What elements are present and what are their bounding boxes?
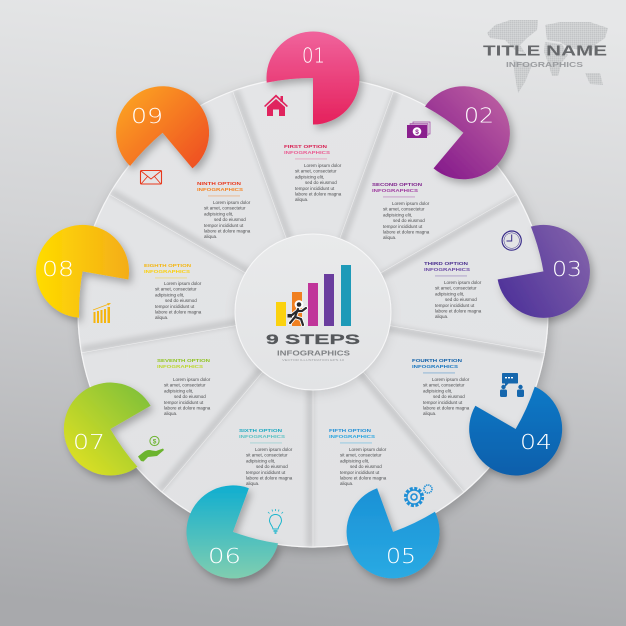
- option 9 text: aliqua.: [204, 234, 217, 239]
- option 5 text: aliqua.: [340, 481, 353, 486]
- option 7 text: INFOGRAPHICS: [157, 364, 204, 370]
- number 06: 06: [208, 544, 241, 568]
- option 3 text: adipisicing elit,: [435, 291, 464, 296]
- number 02: 02: [464, 104, 494, 128]
- option 4 text: tempor incididunt ut: [423, 400, 463, 405]
- option 6 text: INFOGRAPHICS: [239, 434, 286, 440]
- option 5 text: sed do eiusmod: [350, 464, 382, 469]
- wheel disc: [78, 77, 548, 547]
- hub runner icon: [288, 302, 306, 325]
- option 1 text: adipisicing elit,: [295, 174, 324, 179]
- option 5 text: INFOGRAPHICS: [329, 434, 376, 440]
- hub title: INFOGRAPHICS: [277, 348, 350, 358]
- option 4 text: [412, 358, 470, 416]
- option 3 text: labore et dolore magna: [435, 308, 482, 314]
- icon: cash: [407, 122, 430, 138]
- icon: light bulb: [268, 509, 283, 533]
- hub title: [266, 332, 360, 362]
- option 6 text: Lorem ipsum dolor: [255, 447, 293, 452]
- option 8 text: Lorem ipsum dolor: [164, 281, 202, 286]
- option 3 text: THIRD OPTION: [424, 261, 469, 267]
- option 3 text: sed do eiusmod: [445, 297, 477, 302]
- number 08: 08: [42, 257, 74, 281]
- icon: two people talking: [500, 373, 524, 397]
- option 4 text: sit amet, consectetur: [423, 383, 465, 388]
- option 2 text: INFOGRAPHICS: [372, 188, 419, 194]
- option 1 text: tempor incididunt ut: [295, 186, 335, 191]
- option 8 text: EIGHTH OPTION: [144, 263, 192, 269]
- option 2 text: labore et dolore magna: [383, 230, 430, 234]
- step 07 pie: [47, 366, 174, 493]
- number 05: 05: [386, 544, 416, 568]
- option 4 text: sed do eiusmod: [433, 394, 465, 399]
- option 7 text: tempor incididunt ut: [164, 400, 204, 405]
- central hub: [235, 234, 391, 390]
- option 6 text: labore et dolore magna: [246, 476, 293, 480]
- option 7 text: labore et dolore magna: [164, 406, 211, 410]
- option 1 text: [284, 144, 342, 202]
- option 9 text: INFOGRAPHICS: [197, 187, 244, 193]
- option 6 text: adipisicing elit,: [246, 458, 275, 463]
- title block: [483, 43, 607, 69]
- step 08 pie: [29, 218, 136, 325]
- option 3 text: Lorem ipsum dolor: [444, 280, 482, 285]
- option 6 text: sit amet, consectetur: [246, 453, 288, 458]
- option 2 text: aliqua.: [383, 235, 396, 240]
- option 5 text: sit amet, consectetur: [340, 453, 382, 458]
- option 9 text: [197, 181, 251, 239]
- icon: envelope: [140, 170, 162, 184]
- number 07: 07: [73, 430, 105, 454]
- option 7 text: sit amet, consectetur: [164, 383, 206, 388]
- step 05 pie: [333, 472, 453, 591]
- number 04: 04: [520, 430, 552, 454]
- option 4 text: Lorem ipsum dolor: [432, 377, 470, 382]
- option 8 text: sed do eiusmod: [165, 298, 197, 303]
- option 8 text: aliqua.: [155, 315, 168, 320]
- option 6 text: tempor incididunt ut: [246, 470, 286, 475]
- option 5 text: Lorem ipsum dolor: [349, 447, 387, 452]
- option 9 text: tempor incididunt ut: [204, 223, 244, 228]
- option 8 text: labore et dolore magna: [155, 310, 202, 314]
- option 2 text: Lorem ipsum dolor: [392, 201, 430, 206]
- option 4 text: aliqua.: [423, 411, 436, 416]
- step 06 pie: [173, 472, 293, 591]
- title block: INFOGRAPHICS: [506, 62, 583, 69]
- option 8 text: adipisicing elit,: [155, 292, 184, 297]
- world map watermark: [487, 20, 608, 93]
- number 09: 09: [131, 104, 163, 128]
- option 1 text: INFOGRAPHICS: [284, 150, 331, 156]
- title block: TITLE NAME: [483, 43, 607, 60]
- option 6 text: aliqua.: [246, 481, 259, 486]
- icon: clock: [502, 231, 521, 250]
- option 3 text: tempor incididunt ut: [435, 303, 475, 308]
- number 01: 01: [302, 44, 325, 68]
- option 8 text: sit amet, consectetur: [155, 287, 197, 292]
- step 02 pie: [398, 67, 529, 198]
- option 3 text: sit amet, consectetur: [435, 286, 477, 291]
- option 9 text: sit amet, consectetur: [204, 206, 246, 211]
- icon: hand with coin: $: [153, 438, 157, 445]
- option 1 text: FIRST OPTION: [284, 144, 328, 150]
- option 7 text: adipisicing elit,: [164, 388, 193, 393]
- option 4 text: adipisicing elit,: [423, 388, 452, 393]
- option 1 text: sed do eiusmod: [305, 180, 337, 185]
- option 4 text: labore et dolore magna: [423, 406, 470, 410]
- option 8 text: tempor incididunt ut: [155, 304, 195, 309]
- option 6 text: [239, 428, 293, 486]
- hub title: VECTOR ILLUSTRATION EPS 10: [282, 358, 345, 362]
- option 2 text: tempor incididunt ut: [383, 224, 423, 229]
- sector divider shadows: [81, 89, 544, 547]
- option 6 text: sed do eiusmod: [256, 464, 288, 469]
- option 2 text: sed do eiusmod: [393, 218, 425, 223]
- option 8 text: [144, 263, 202, 320]
- option 8 text: INFOGRAPHICS: [144, 269, 191, 275]
- step 09 pie: [97, 67, 228, 198]
- option 4 text: FOURTH OPTION: [412, 358, 463, 364]
- option 4 text: INFOGRAPHICS: [412, 364, 459, 370]
- option 7 text: SEVENTH OPTION: [157, 358, 211, 364]
- hub bar chart: [276, 265, 351, 326]
- option 5 text: FIFTH OPTION: [329, 428, 372, 434]
- icon: gears: [405, 485, 432, 506]
- step 03 pie: [490, 217, 597, 325]
- option 2 text: [372, 182, 430, 240]
- option 3 text: [424, 261, 482, 319]
- option 1 text: sit amet, consectetur: [295, 169, 337, 174]
- option 7 text: aliqua.: [164, 411, 177, 416]
- option 5 text: [329, 428, 387, 486]
- option 9 text: labore et dolore magna: [204, 228, 251, 234]
- icon: hand with coin: [138, 436, 164, 462]
- option 2 text: adipisicing elit,: [383, 212, 412, 217]
- option 9 text: Lorem ipsum dolor: [213, 200, 251, 205]
- option 7 text: [157, 358, 211, 416]
- option 1 text: labore et dolore magna: [295, 192, 342, 196]
- option 1 text: aliqua.: [295, 197, 308, 202]
- option 9 text: NINTH OPTION: [197, 181, 242, 187]
- option 9 text: adipisicing elit,: [204, 211, 233, 216]
- option 1 text: Lorem ipsum dolor: [304, 163, 342, 168]
- step 04 pie: [452, 365, 579, 492]
- option 5 text: adipisicing elit,: [340, 458, 369, 463]
- option 7 text: sed do eiusmod: [174, 394, 206, 399]
- option 5 text: labore et dolore magna: [340, 476, 387, 480]
- option 6 text: SIXTH OPTION: [239, 428, 283, 434]
- option 2 text: SECOND OPTION: [372, 182, 423, 188]
- icon: house: [264, 94, 288, 116]
- icon: cash: $: [415, 129, 419, 136]
- option 7 text: Lorem ipsum dolor: [173, 377, 211, 382]
- step 01 pie: [266, 32, 359, 124]
- option 2 text: sit amet, consectetur: [383, 207, 425, 212]
- option 3 text: aliqua.: [435, 314, 448, 319]
- option 5 text: tempor incididunt ut: [340, 470, 380, 475]
- icon: rising chart: [93, 303, 111, 323]
- number 03: 03: [552, 257, 582, 281]
- hub title: 9 STEPS: [266, 332, 360, 347]
- option 3 text: INFOGRAPHICS: [424, 267, 471, 273]
- option 9 text: sed do eiusmod: [214, 217, 246, 222]
